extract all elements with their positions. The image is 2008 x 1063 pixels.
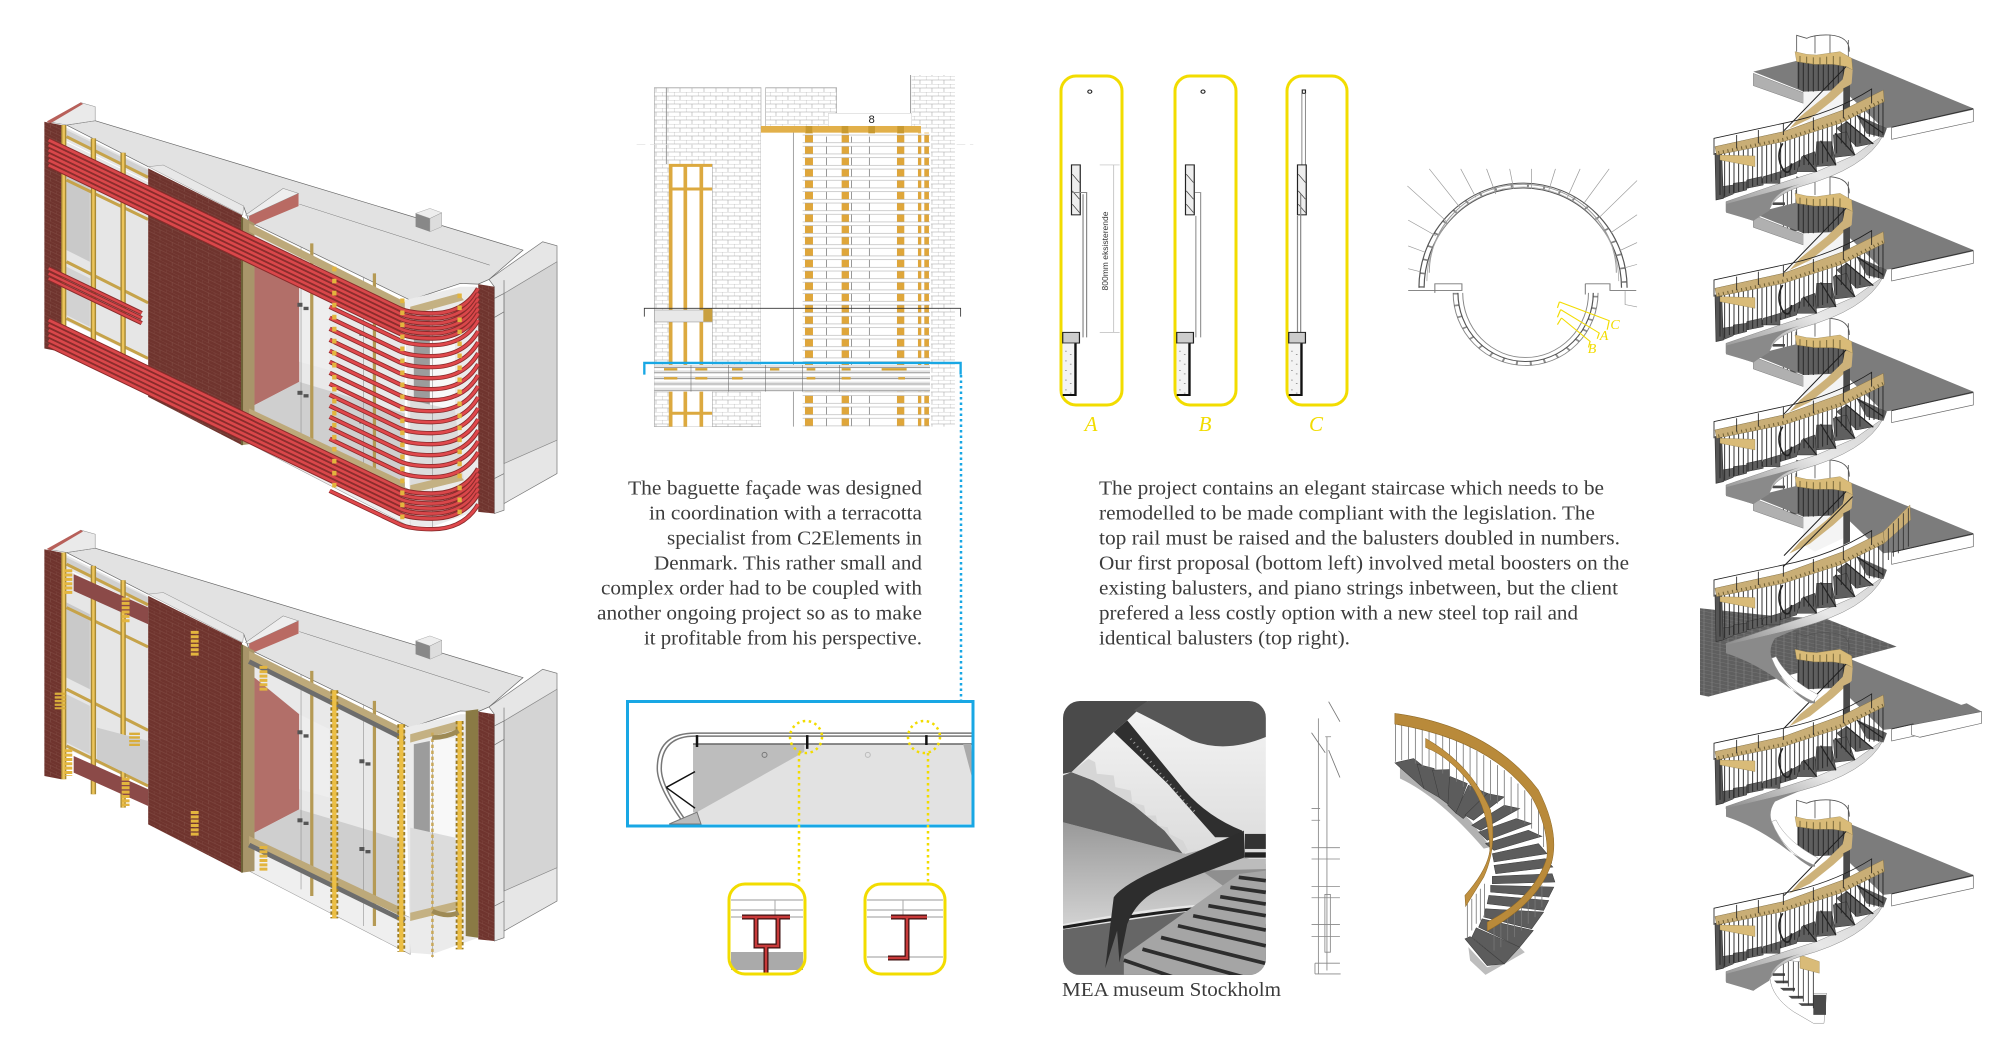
detail: Z bracket — [865, 884, 945, 974]
section letters: C — [1309, 412, 1324, 436]
yellow dotted callout circles and connectors — [790, 721, 940, 883]
dotted blue connector — [960, 375, 962, 700]
text: baguette facade: Denmark. This rather small and — [654, 552, 922, 574]
gold fixing rails — [60, 569, 460, 957]
section cut line — [644, 308, 961, 317]
rendered curved staircase — [1395, 713, 1555, 975]
text: baguette facade: another ongoing project so as to make — [597, 602, 922, 624]
section letters: A — [1083, 412, 1098, 436]
photo: MEA museum staircase — [1063, 701, 1266, 978]
text: staircase — [1099, 478, 1629, 650]
stair unit 6 — [1714, 800, 1973, 991]
text: staircase: existing balusters, and piano strings inbetween, but the client — [1099, 578, 1618, 600]
baguette band in section — [654, 365, 930, 392]
plan letters: C — [1610, 318, 1620, 333]
dimension label: 800mm eksisterende — [1100, 211, 1110, 290]
stringer and landing — [1400, 767, 1525, 975]
stair unit 5 — [1714, 633, 1982, 867]
treads — [1395, 758, 1555, 966]
text: staircase: top rail must be raised and the balusters doubled in numbers. — [1099, 528, 1620, 550]
elevation drawing — [637, 75, 973, 427]
new railing section — [1312, 702, 1341, 974]
elevation label: 8 — [868, 114, 875, 126]
right window bay with baguettes — [761, 126, 931, 427]
brick elevation background — [637, 75, 973, 427]
terracotta baguette bands — [49, 140, 478, 529]
steel beams and brick panels — [74, 574, 478, 938]
stair unit 3 — [1714, 318, 1973, 504]
outer timber rail — [1395, 713, 1554, 931]
axonometric facade with terracotta baguettes — [44, 102, 557, 530]
text: baguette facade — [597, 478, 922, 650]
text: baguette facade: in coordination with a terracotta — [649, 502, 922, 524]
text: staircase: prefered a less costly option with a new steel top rail and — [1099, 602, 1578, 624]
axonometric facade showing the support structure — [44, 530, 557, 958]
caption: MEA museum Stockholm — [1062, 979, 1281, 1001]
spiral staircase axonometric tower — [1700, 35, 1982, 1023]
text: staircase: The project contains an elegant staircase which needs to be — [1099, 478, 1604, 500]
stair unit 4 — [1714, 460, 1973, 703]
plan letters: B — [1588, 342, 1597, 357]
plan letters: A — [1599, 329, 1609, 344]
text: staircase: identical balusters (top right). — [1099, 628, 1350, 650]
balusters — [1396, 723, 1551, 951]
inner timber rail — [1426, 738, 1493, 906]
railing section B — [1175, 76, 1236, 405]
text: baguette facade: it profitable from his perspective. — [644, 628, 922, 650]
text: staircase: remodelled to be made compliant with the legislation. The — [1099, 502, 1595, 524]
blue section bracket — [644, 363, 961, 375]
railing section A — [1061, 76, 1122, 405]
plan letters — [1588, 318, 1620, 357]
tower floor plate with hatch — [1700, 608, 1897, 697]
blue detail box: plan of baguette — [628, 702, 973, 826]
staircase plan — [1407, 169, 1637, 366]
railing section C — [1287, 76, 1347, 405]
left window frame — [654, 164, 712, 427]
text: baguette facade: The baguette façade was designed — [628, 478, 922, 500]
text: staircase: Our first proposal (bottom left) involved metal boosters on the — [1099, 552, 1629, 574]
text: baguette facade: specialist from C2Elements in — [667, 528, 922, 550]
stair unit 2 — [1714, 177, 1973, 362]
detail: T bracket — [729, 884, 805, 974]
section letters — [1083, 412, 1324, 436]
stair unit 1 — [1714, 35, 1973, 221]
text: baguette facade: complex order had to be coupled with — [601, 578, 922, 600]
bottom stair flight — [1770, 955, 1827, 1023]
section letters: B — [1199, 412, 1212, 436]
